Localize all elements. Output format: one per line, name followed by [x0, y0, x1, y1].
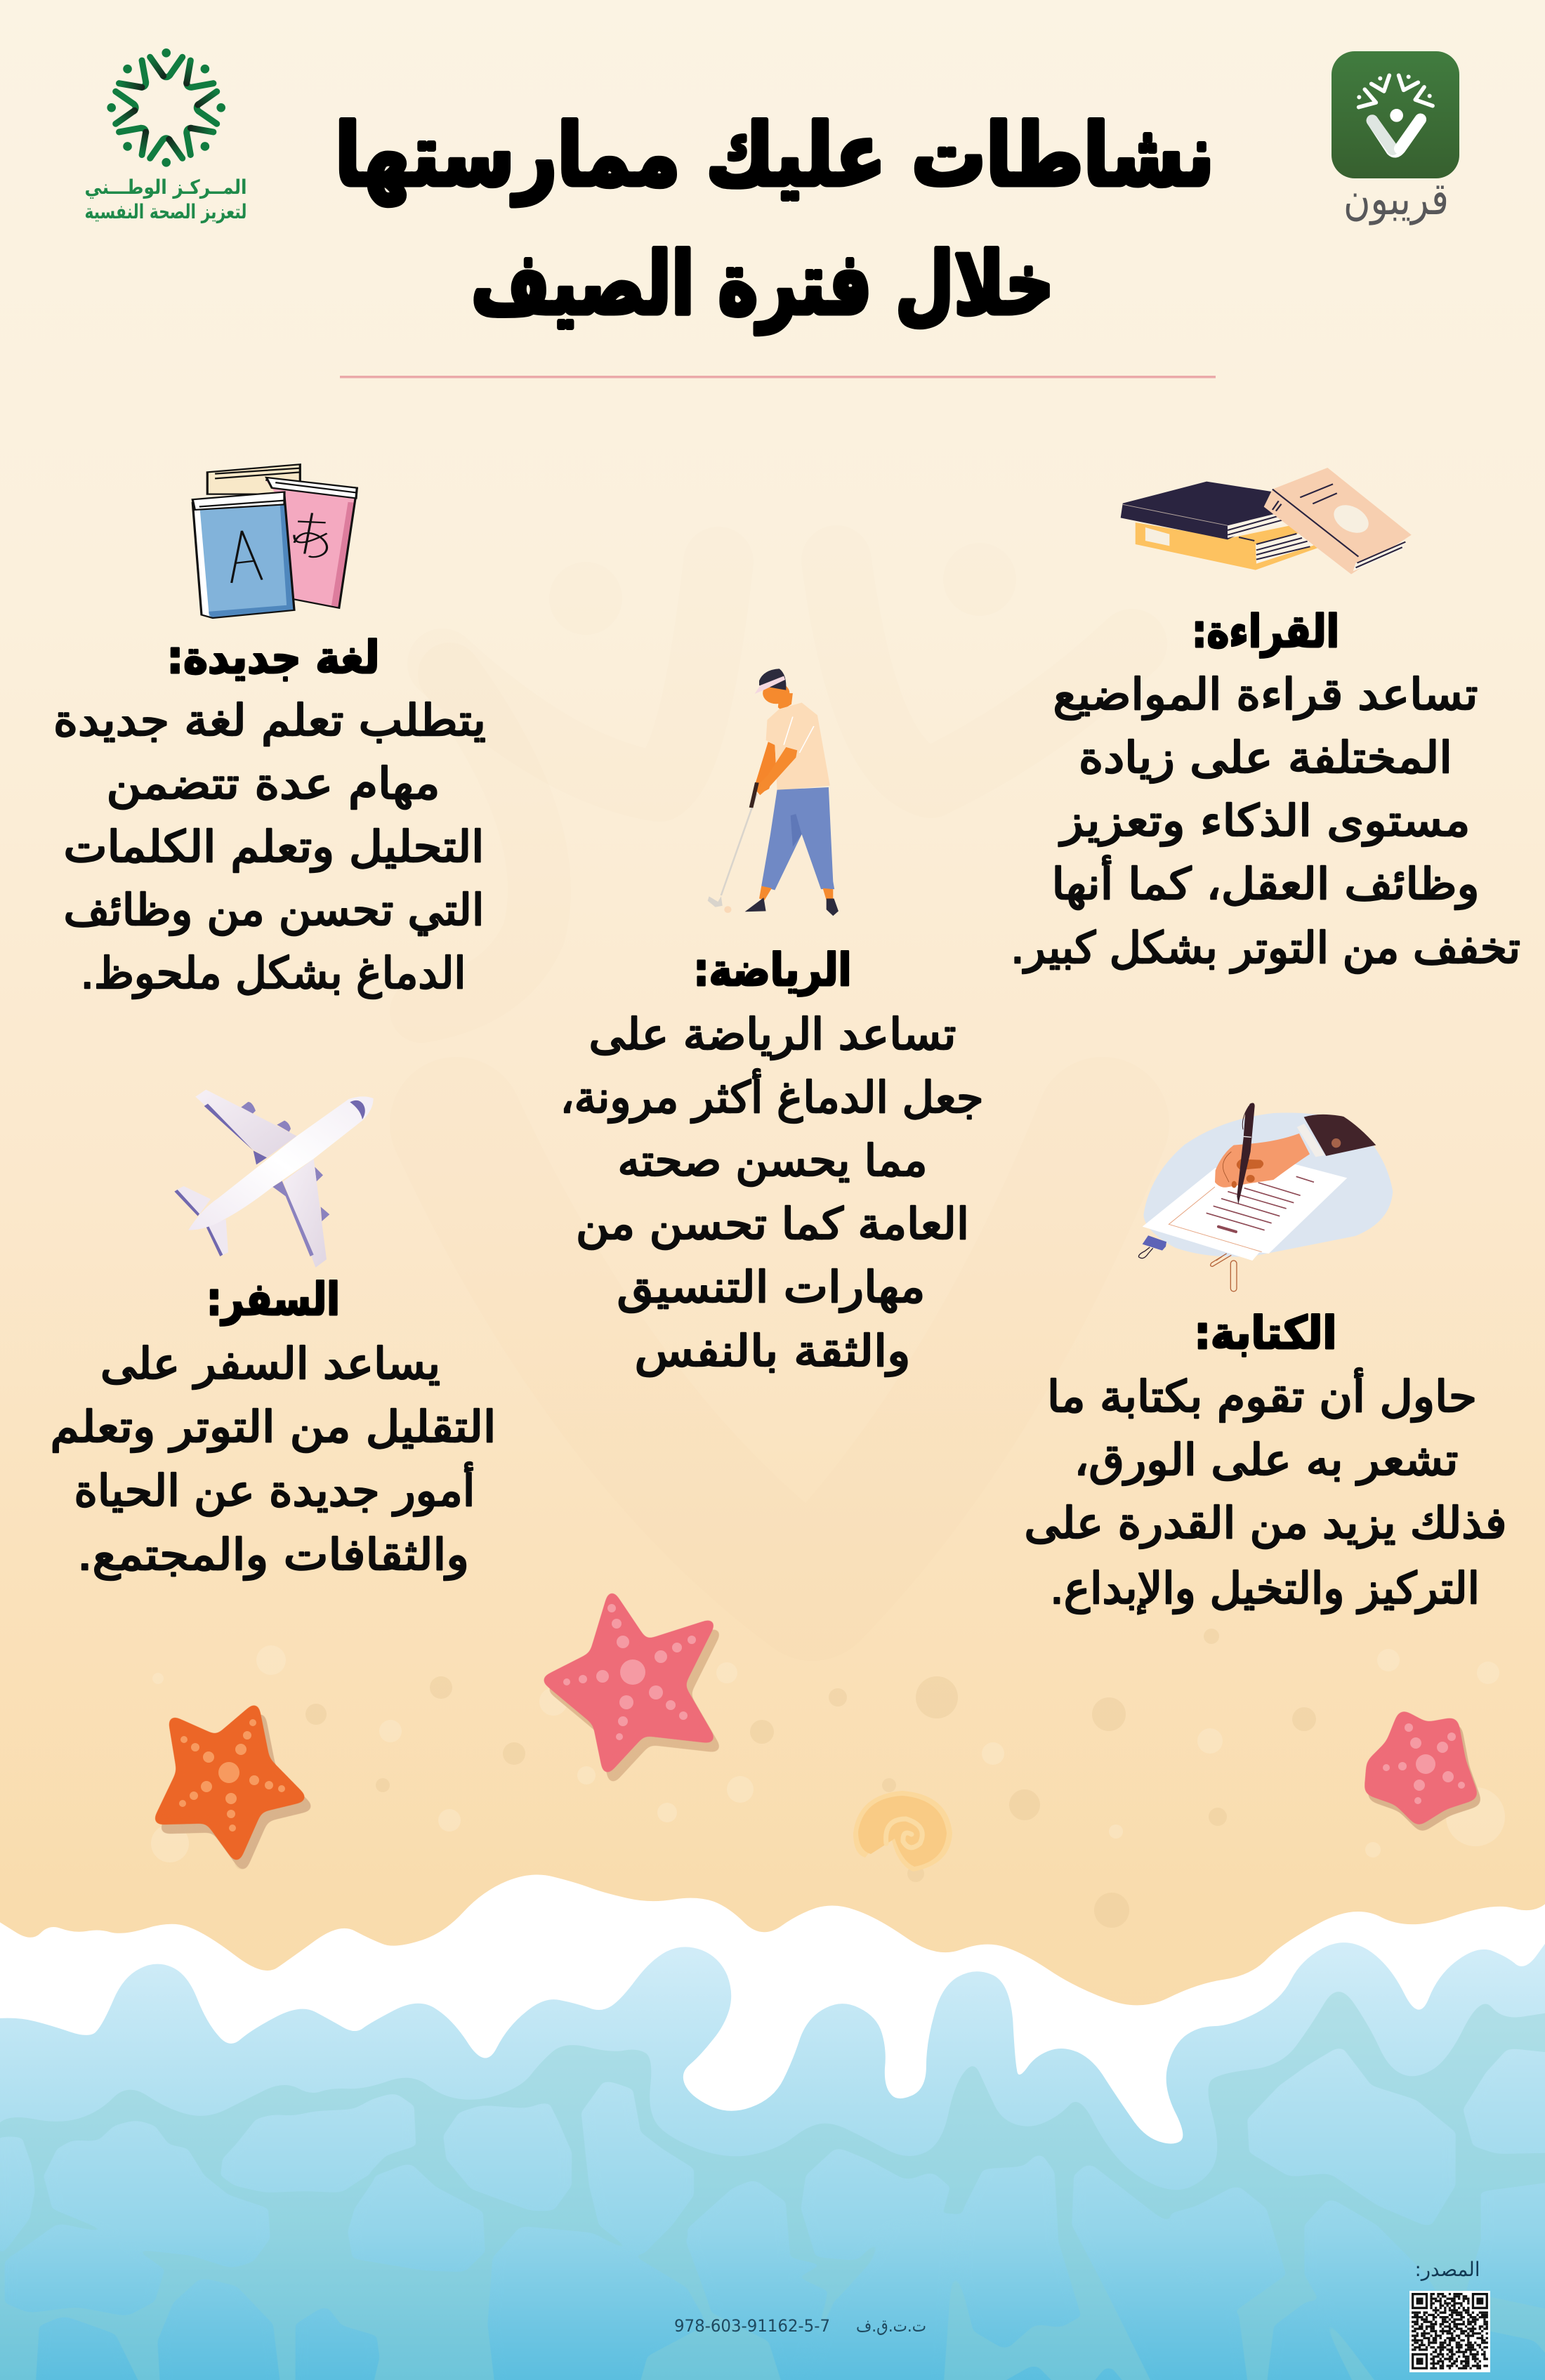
heading: travel: والثقافات والمجتمع.: [77, 1529, 469, 1580]
source label: المصدر:: [1414, 2258, 1480, 2281]
heading: sport: الرياضة:: [694, 945, 851, 997]
logo caption: قريبون: [1343, 173, 1449, 225]
heading: sport: مهارات التنسيق: [617, 1261, 926, 1313]
heading: travel: يساعد السفر على: [100, 1338, 440, 1389]
heading: writing: الكتابة:: [1194, 1308, 1337, 1360]
icon: writing hand: [1138, 1103, 1393, 1291]
heading: travel: السفر:: [206, 1274, 340, 1326]
logo text: national centre: لتعزيز الصحة النفسية: [84, 200, 247, 223]
heading: reading: القراءة:: [1192, 606, 1339, 658]
title rule: [340, 376, 1216, 378]
heading: reading: تساعد قراءة المواضيع: [1053, 669, 1478, 720]
heading: language: مهام عدة تتضمن: [107, 758, 440, 810]
logo: green app tile: [1332, 51, 1459, 178]
white foam: [0, 1874, 1545, 2380]
heading: sport: مما يحسن صحته: [618, 1135, 927, 1186]
shell: [853, 1791, 952, 1872]
icon: stack of books: [1121, 468, 1412, 574]
heading: reading: المختلفة على زيادة: [1079, 732, 1452, 783]
heading: language: التحليل وتعلم الكلمات: [63, 821, 485, 872]
heading: reading: وظائف العقل، كما أنها: [1052, 855, 1479, 910]
title: نشاطات عليك ممارستها: [335, 105, 1214, 206]
heading: writing: فذلك يزيد من القدرة على: [1024, 1497, 1507, 1549]
logo: national centre star: [107, 48, 225, 167]
heading: sport: [560, 945, 983, 1376]
lighter water blobs: [0, 2047, 1545, 2380]
ISBN line: ت.ت.ق.ف: [856, 2316, 926, 2336]
heading: language: [53, 632, 486, 999]
foam and sea: [0, 1874, 1545, 2380]
heading: travel: التقليل من التوتر وتعلم: [51, 1401, 496, 1452]
icon: golfer: [708, 669, 839, 916]
heading: language: التي تحسن من وظائف: [63, 884, 485, 935]
heading: sport: العامة كما تحسن من: [576, 1198, 969, 1249]
QR code: [1409, 2291, 1490, 2372]
watermark logo shapes: [421, 543, 1132, 1594]
logo text: national centre: [84, 176, 247, 223]
ISBN line: 978-603-91162-5-7: [674, 2316, 830, 2336]
water: [0, 1942, 1545, 2380]
icon: language books: [192, 464, 357, 618]
heading: writing: تشعر به على الورق،: [1074, 1434, 1458, 1485]
heading: sport: جعل الدماغ أكثر مرونة،: [560, 1069, 983, 1123]
icon: airplane: [174, 1090, 374, 1268]
starfish: pink small: [1371, 1717, 1475, 1825]
heading: language: الدماغ بشكل ملحوظ.: [80, 947, 466, 999]
heading: travel: أمور جديدة عن الحياة: [74, 1462, 475, 1516]
sand speckles: [151, 1629, 1505, 1928]
title: خلال فترة الصيف: [471, 234, 1054, 334]
ISBN line: [674, 2316, 926, 2336]
heading: sport: تساعد الرياضة على: [589, 1008, 956, 1060]
darker water layer: [0, 1992, 1545, 2380]
starfish: orange: [158, 1708, 308, 1867]
heading: sport: والثقة بالنفس: [635, 1325, 910, 1376]
logo text: national centre: المــركـز الوطـــني: [84, 176, 247, 199]
heading: writing: حاول أن تقوم بكتابة ما: [1047, 1368, 1477, 1422]
heading: reading: [1011, 606, 1520, 973]
heading: language: يتطلب تعلم لغة جديدة: [53, 695, 486, 746]
heading: reading: تخفف من التوتر بشكل كبير.: [1011, 922, 1520, 973]
heading: reading: مستوى الذكاء وتعزيز: [1058, 795, 1471, 846]
heading: writing: التركيز والتخيل والإبداع.: [1050, 1563, 1480, 1615]
heading: writing: [1024, 1308, 1507, 1615]
title: [335, 105, 1214, 334]
starfish: pink large: [546, 1596, 716, 1779]
heading: travel: [51, 1274, 496, 1580]
heading: language: لغة جديدة:: [167, 632, 379, 684]
